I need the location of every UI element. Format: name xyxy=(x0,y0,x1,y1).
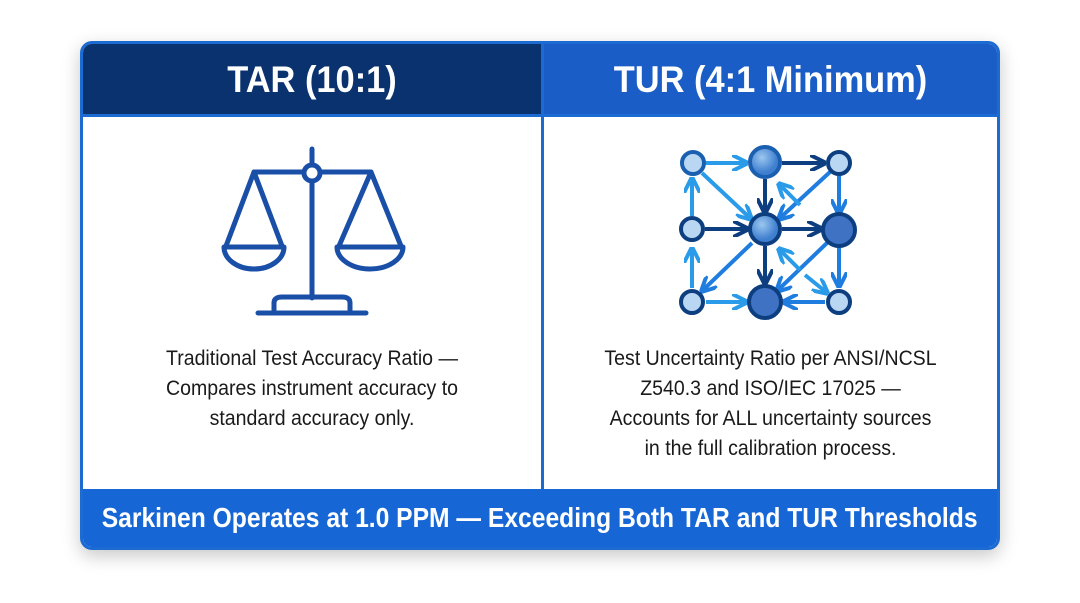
text: TUR description xyxy=(604,347,937,460)
comparison card xyxy=(80,41,1000,550)
header: TAR xyxy=(83,44,541,117)
text: TUR description: Z540.3 and ISO/IEC 17025 — xyxy=(640,377,901,400)
header: TAR: TAR (10:1) xyxy=(227,59,397,100)
footer banner: Sarkinen Operates at 1.0 PPM — Exceeding Both TAR and TUR Thresholds xyxy=(102,502,978,533)
text: TAR description xyxy=(166,347,458,430)
header: TUR xyxy=(544,44,997,117)
text: TAR description: Compares instrument accuracy to xyxy=(166,377,458,400)
text: TAR description: standard accuracy only. xyxy=(210,407,414,430)
text: TUR description: in the full calibration process. xyxy=(645,437,896,460)
text: TAR description: Traditional Test Accuracy Ratio — xyxy=(166,347,458,370)
text: TUR description: Test Uncertainty Ratio per ANSI/NCSL xyxy=(604,347,937,370)
text: TUR description: Accounts for ALL uncertainty sources xyxy=(610,407,931,430)
header: TUR: TUR (4:1 Minimum) xyxy=(614,59,927,100)
footer banner xyxy=(83,489,997,547)
